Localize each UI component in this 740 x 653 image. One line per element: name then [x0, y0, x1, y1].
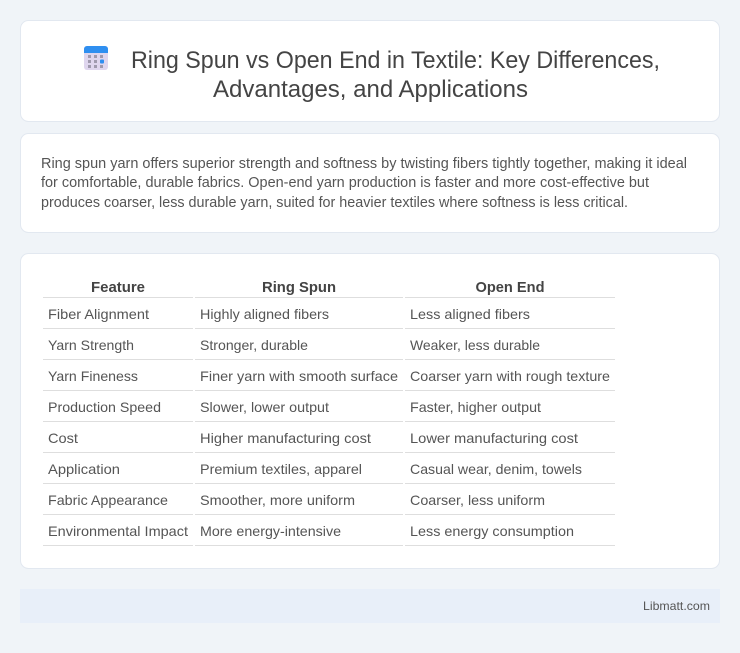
- row: Yarn Strength: [48, 337, 540, 353]
- row: Yarn Strength: Weaker, less durable: [410, 337, 540, 353]
- row: Fabric Appearance: Coarser, less uniform: [410, 492, 545, 508]
- row: Production Speed: Faster, higher output: [410, 399, 541, 415]
- row: Fiber Alignment: Less aligned fibers: [410, 306, 530, 322]
- panel: comparison table: [20, 254, 720, 568]
- footer text: Libmatt.com: [643, 599, 710, 613]
- intro text: for comfortable, durable fabrics. Open-end yarn production is faster and more cost-effective but: [41, 175, 649, 191]
- table header: Open End: [476, 279, 544, 296]
- row: Fabric Appearance: Smoother, more uniform: [200, 492, 355, 508]
- footer: [20, 589, 720, 623]
- row: Application: Casual wear, denim, towels: [410, 461, 582, 477]
- row: Production Speed: [48, 399, 541, 415]
- row: Environmental Impact: More energy-intensive: [200, 523, 341, 539]
- row: Environmental Impact: Environmental Impact: [48, 523, 188, 539]
- row: Yarn Fineness: Yarn Fineness: [48, 368, 138, 384]
- row: Yarn Fineness: Coarser yarn with rough texture: [410, 368, 610, 384]
- row: Application: [48, 461, 582, 477]
- row: Fiber Alignment: Highly aligned fibers: [200, 306, 329, 322]
- row: Yarn Fineness: Finer yarn with smooth surface: [200, 368, 398, 384]
- row: Fabric Appearance: [48, 492, 545, 508]
- row: Application: Premium textiles, apparel: [200, 461, 362, 477]
- row: Production Speed: Production Speed: [48, 399, 161, 415]
- row: Cost: [48, 430, 578, 446]
- row: Production Speed: Slower, lower output: [200, 399, 329, 415]
- row: Yarn Fineness: [48, 368, 610, 384]
- row: Environmental Impact: Less energy consumption: [410, 523, 574, 539]
- icon: calendar: [84, 46, 108, 70]
- row: Yarn Strength: Yarn Strength: [48, 337, 134, 353]
- row: Fiber Alignment: [48, 306, 530, 322]
- row: Environmental Impact: [48, 523, 574, 539]
- panel: title: [20, 20, 720, 122]
- row: Application: Application: [48, 461, 120, 477]
- row: Fabric Appearance: Fabric Appearance: [48, 492, 168, 508]
- intro text: [41, 156, 687, 211]
- row: Cost: Lower manufacturing cost: [410, 430, 578, 446]
- panel: introduction: [20, 134, 720, 232]
- title text: [131, 47, 660, 103]
- title text: Ring Spun vs Open End in Textile: Key Differences,: [131, 47, 660, 74]
- table header: [91, 279, 544, 296]
- intro text: produces coarser, less durable yarn, suited for heavier textiles where softness is less critical.: [41, 195, 628, 211]
- intro text: Ring spun yarn offers superior strength and softness by twisting fibers tightly together, making it ideal: [41, 156, 687, 172]
- row: Fiber Alignment: Fiber Alignment: [48, 306, 149, 322]
- row: Cost: Cost: [48, 430, 78, 446]
- table header: Feature: [91, 279, 145, 296]
- row: Cost: Higher manufacturing cost: [200, 430, 371, 446]
- title text: Advantages, and Applications: [213, 76, 528, 103]
- row: Yarn Strength: Stronger, durable: [200, 337, 308, 353]
- table header: Ring Spun: [262, 279, 336, 296]
